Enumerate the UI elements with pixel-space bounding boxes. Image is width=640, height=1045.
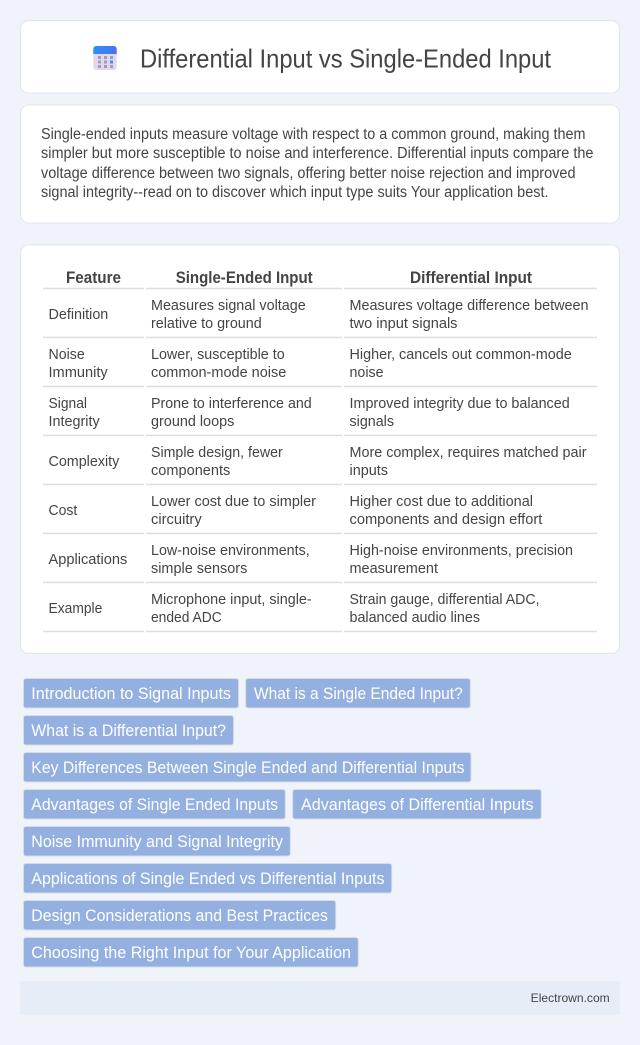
text block: intro paragraph xyxy=(41,126,594,201)
table row: complexity: components xyxy=(151,462,230,479)
table row: complexity: More complex, requires matched pair xyxy=(350,444,586,461)
tag: applications: Applications of Single Ended vs Differential Inputs xyxy=(31,870,385,888)
table header row: Single-Ended Input xyxy=(176,269,313,287)
tag: key differences: Key Differences Between Single Ended and Differential Inputs xyxy=(31,759,465,777)
table row: cost: Higher cost due to additional xyxy=(350,493,533,510)
tag: noise immunity xyxy=(24,826,290,856)
table row: cost: circuitry xyxy=(151,511,202,528)
table row: noise immunity: Immunity xyxy=(48,364,108,381)
table row: cost: components and design effort xyxy=(350,511,543,528)
table row: noise immunity xyxy=(43,346,597,387)
tag: applications xyxy=(24,864,392,893)
table row: example: Microphone input, single- xyxy=(151,591,312,608)
table row: applications: Low-noise environments, xyxy=(151,542,310,559)
table row: example: balanced audio lines xyxy=(350,609,480,626)
text block: intro paragraph: Single-ended inputs measure voltage with respect to a common ground, making them xyxy=(41,126,586,143)
table row: complexity: inputs xyxy=(350,462,388,479)
table row: signal integrity: signals xyxy=(350,413,394,430)
table row: definition xyxy=(43,297,597,338)
table row: signal integrity: Integrity xyxy=(48,413,100,430)
tag: noise immunity: Noise Immunity and Signal Integrity xyxy=(31,833,284,851)
table row: complexity: Simple design, fewer xyxy=(151,444,283,461)
tag: advantages single ended: Advantages of Single Ended Inputs xyxy=(31,796,278,814)
table row: applications: Applications xyxy=(48,551,127,568)
tag: design considerations xyxy=(24,900,336,930)
table row: definition: relative to ground xyxy=(151,315,262,332)
text block: intro paragraph: simpler but more susceptible to noise and interference. Differential inputs compare the xyxy=(41,145,594,162)
tag: key differences xyxy=(24,752,471,782)
tag: advantages single ended xyxy=(24,790,285,819)
table row: example: ended ADC xyxy=(151,609,222,626)
tag: choosing input: Choosing the Right Input for Your Application xyxy=(31,944,351,962)
table row: definition: Measures signal voltage xyxy=(151,297,306,314)
table row: noise immunity: Noise xyxy=(48,346,85,363)
table row: signal integrity: Signal xyxy=(48,395,87,412)
table row: applications: High-noise environments, precision xyxy=(350,542,573,559)
tag: advantages differential xyxy=(293,790,541,819)
table row: cost: Cost xyxy=(48,502,78,519)
tag: advantages differential: Advantages of Differential Inputs xyxy=(301,796,534,814)
table row: example: Example xyxy=(48,600,102,617)
table row: noise immunity: Higher, cancels out common-mode xyxy=(350,346,572,363)
table row: applications: measurement xyxy=(350,560,439,577)
table header row: Feature xyxy=(66,269,121,287)
tag: introduction: Introduction to Signal Inputs xyxy=(31,685,231,703)
table row: signal integrity xyxy=(43,395,597,436)
tag: single ended input: What is a Single Ended Input? xyxy=(254,685,463,703)
tag: differential input xyxy=(24,716,234,745)
tag: design considerations: Design Considerations and Best Practices xyxy=(31,907,328,925)
table row: definition: two input signals xyxy=(350,315,458,332)
icon: calendar xyxy=(93,46,117,70)
table row: definition: Definition xyxy=(48,306,108,323)
panel: title header xyxy=(20,20,620,93)
title: Differential Input vs Single-Ended Input xyxy=(140,44,552,74)
panel: section tags xyxy=(24,678,541,967)
table row: example xyxy=(43,591,597,632)
tag: choosing input xyxy=(24,938,358,967)
table row: noise immunity: common-mode noise xyxy=(151,364,286,381)
footer credit: Electrown.com xyxy=(531,991,610,1005)
text block: intro paragraph: voltage difference between two signals, offering better noise rejection and improved xyxy=(41,165,576,182)
table row: noise immunity: Lower, susceptible to xyxy=(151,346,285,363)
panel: introduction text xyxy=(20,105,620,223)
table row: signal integrity: Prone to interference and xyxy=(151,395,312,412)
table header row xyxy=(43,269,597,289)
table row: signal integrity: ground loops xyxy=(151,413,234,430)
table row: noise immunity: noise xyxy=(350,364,384,381)
tag: introduction xyxy=(24,678,238,708)
footer xyxy=(20,981,620,1015)
table row: example: Strain gauge, differential ADC, xyxy=(350,591,540,608)
text block: intro paragraph: signal integrity--read on to discover which input type suits Your application best. xyxy=(41,184,548,201)
table row: applications: simple sensors xyxy=(151,560,247,577)
tag: single ended input xyxy=(246,678,470,708)
tag: differential input: What is a Differential Input? xyxy=(31,722,226,740)
table header row: Differential Input xyxy=(410,269,532,287)
table row: complexity xyxy=(43,444,597,485)
table row: cost: Lower cost due to simpler xyxy=(151,493,316,510)
table row: applications xyxy=(43,542,597,583)
table row: complexity: Complexity xyxy=(48,453,120,470)
table row: definition: Measures voltage difference between xyxy=(350,297,588,314)
table row: signal integrity: Improved integrity due to balanced xyxy=(350,395,570,412)
table row: cost xyxy=(43,493,597,534)
panel: comparison table xyxy=(20,245,620,654)
